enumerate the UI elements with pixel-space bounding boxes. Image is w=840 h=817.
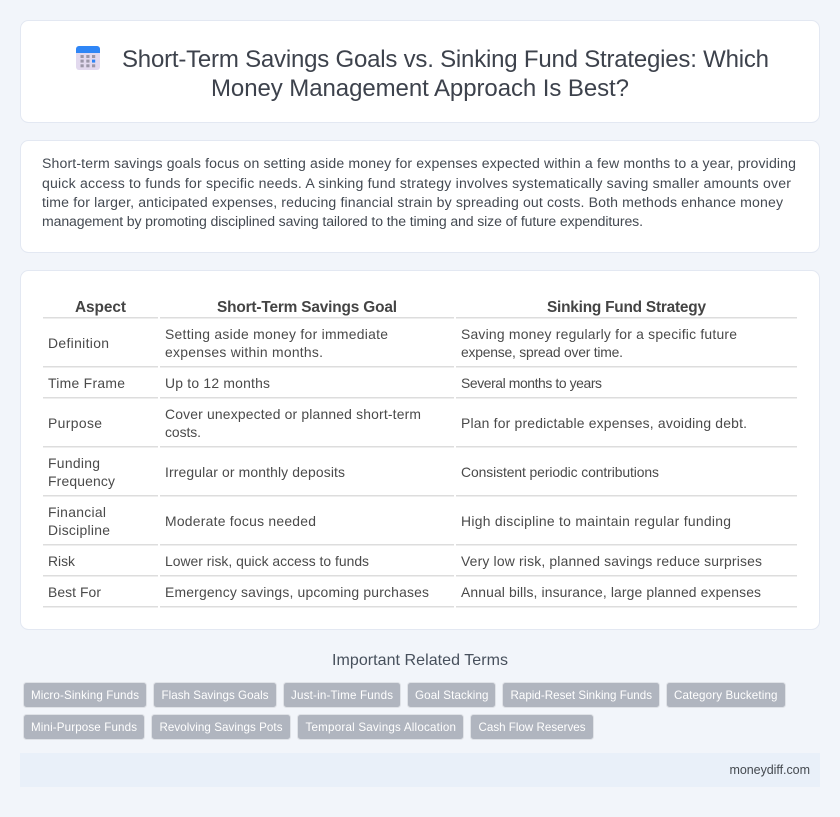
tag: Flash Savings Goals (162, 689, 269, 702)
row: definition (43, 326, 797, 368)
tag: Rapid-Reset Sinking Funds (510, 689, 652, 702)
row: funding frequency: Funding (48, 455, 100, 471)
row: best for: Best For (48, 584, 101, 600)
tag (502, 682, 660, 708)
tag (24, 714, 144, 740)
tag (152, 714, 290, 740)
row: financial discipline: Moderate focus needed (165, 513, 316, 529)
footer: moneydiff.com (730, 763, 810, 777)
tag (470, 714, 594, 740)
panel: introduction text: Short-term savings goals focus on setting aside money for expenses expected within a few months to a year, providing (42, 155, 796, 171)
tag: Mini-Purpose Funds (31, 721, 137, 734)
panel: introduction text: quick access to funds for specific needs. A sinking fund strategy involves systematically saving smaller amounts over (42, 175, 791, 191)
tag (284, 682, 400, 708)
panel: introduction text: management by promoting disciplined saving tailored to the timing and size of future expenditures. (42, 213, 643, 229)
row: risk (43, 553, 797, 576)
tag (154, 682, 276, 708)
panel: introduction text: time for larger, anticipated expenses, reducing financial strain by spreading out costs. Both methods enhance money (42, 194, 784, 210)
tag: Category Bucketing (674, 689, 778, 702)
row: financial discipline: Discipline (48, 522, 110, 538)
tag (666, 682, 786, 708)
tag (24, 682, 146, 708)
tags: related terms (24, 682, 786, 740)
row: purpose: Plan for predictable expenses, avoiding debt. (461, 415, 747, 431)
title: Money Management Approach Is Best? (211, 75, 629, 102)
row: funding frequency: Consistent periodic contributions (461, 464, 659, 480)
tag (408, 682, 496, 708)
row: funding frequency: Frequency (48, 473, 115, 489)
row: best for: Annual bills, insurance, large planned expenses (461, 584, 761, 600)
footer (20, 753, 820, 787)
row: funding frequency (43, 455, 797, 496)
row: financial discipline: Financial (48, 504, 106, 520)
table header row: Sinking Fund Strategy (547, 299, 706, 316)
row: time frame: Time Frame (48, 375, 125, 391)
row: definition: Saving money regularly for a specific future (461, 326, 737, 342)
panel: title header (20, 20, 820, 122)
row: time frame (43, 375, 797, 398)
icon: calendar (76, 46, 100, 70)
table header row: Short-Term Savings Goal (217, 299, 397, 316)
row: financial discipline: High discipline to maintain regular funding (461, 513, 731, 529)
title: Short-Term Savings Goals vs. Sinking Fund Strategies: Which (122, 46, 769, 73)
heading: important related terms: Important Related Terms (332, 652, 508, 669)
row: risk: Risk (48, 553, 75, 569)
panel: comparison table (20, 270, 820, 630)
table header row: Aspect (75, 299, 126, 316)
row: purpose: Cover unexpected or planned short-term (165, 406, 421, 422)
row: financial discipline (43, 504, 797, 546)
table header row (43, 299, 797, 318)
tag (298, 714, 464, 740)
tag: Just-in-Time Funds (291, 689, 393, 702)
title (122, 46, 769, 102)
tag: Temporal Savings Allocation (306, 721, 456, 734)
row: best for: Emergency savings, upcoming purchases (165, 584, 429, 600)
row: definition: expense, spread over time. (461, 344, 623, 360)
row: time frame: Several months to years (461, 375, 602, 391)
row: purpose: Purpose (48, 415, 102, 431)
row: definition: Definition (48, 335, 109, 351)
tag: Revolving Savings Pots (160, 721, 283, 734)
tag: Micro-Sinking Funds (31, 689, 139, 702)
row: funding frequency: Irregular or monthly deposits (165, 464, 345, 480)
panel: introduction text (20, 140, 820, 252)
row: risk: Lower risk, quick access to funds (165, 553, 369, 569)
row: time frame: Up to 12 months (165, 375, 270, 391)
row: risk: Very low risk, planned savings reduce surprises (461, 553, 762, 569)
row: definition: expenses within months. (165, 344, 323, 360)
tag: Goal Stacking (415, 689, 488, 702)
tag: Cash Flow Reserves (478, 721, 586, 734)
row: definition: Setting aside money for immediate (165, 326, 388, 342)
row: purpose: costs. (165, 424, 201, 440)
row: best for (43, 584, 797, 608)
row: purpose (43, 406, 797, 448)
